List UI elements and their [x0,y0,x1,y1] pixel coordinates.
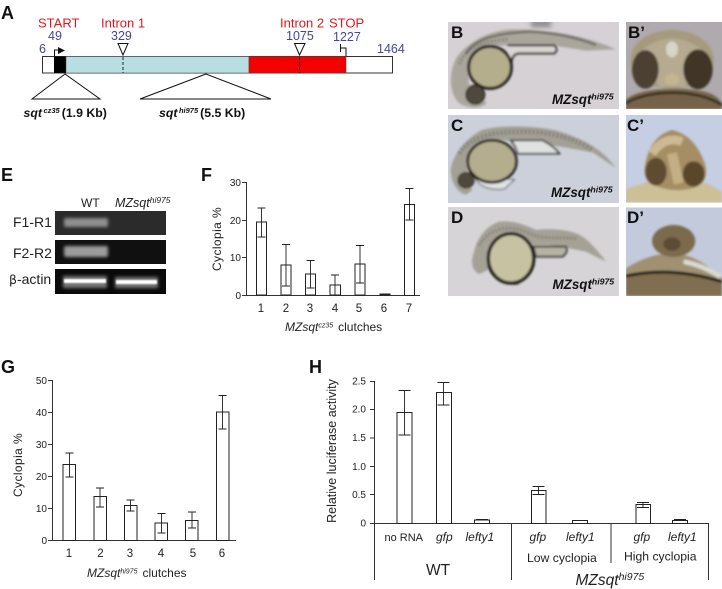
stop marker [340,44,346,56]
x tick labels [258,303,412,315]
start arrow [54,47,65,56]
MZsqt label: MZsqt [576,572,619,589]
panel label A: A [1,3,14,23]
row labels: F1-R1 [13,214,52,230]
photo C label: C [451,116,463,135]
y ticks: 0.5 [352,490,366,501]
axes [48,380,236,540]
allele label cz35: (1.9 Kb) [62,106,107,120]
position numbers: 1464 [377,42,405,56]
row labels [9,214,52,287]
x tick labels: 5 [190,548,196,560]
photo B prime label: B’ [628,23,645,42]
x tick labels: 7 [406,303,412,315]
position numbers: 329 [111,29,132,43]
bars [256,204,414,296]
y ticks: 1.5 [352,433,366,444]
genotype label B: hi975 [591,92,614,102]
x axis title: cz35 [318,322,333,330]
Intron 2 label: Intron 2 [280,16,324,30]
treatment labels: gfp [634,530,651,544]
treatment labels: gfp [436,530,453,544]
photo B label: B [451,23,463,42]
x axis title: hi975 [120,568,138,576]
treatment labels [384,530,697,544]
x tick labels: 1 [258,303,264,315]
photo D [448,207,619,296]
intron 2 marker [294,44,305,55]
position numbers: 49 [48,29,62,43]
lane label MZsqt: hi975 [150,195,171,205]
y ticks: 0 [41,536,47,547]
allele label cz35: sqt [24,106,43,120]
insertion triangle hi975 [140,74,271,99]
y ticks: 20 [230,216,241,227]
bars [397,392,688,524]
photo B prime [626,22,722,109]
x tick labels: 6 [219,548,225,560]
STOP label: STOP [329,16,364,30]
MZsqt label: hi975 [619,571,644,583]
y ticks [230,178,241,302]
y ticks: 2.0 [352,404,366,416]
x tick labels: 3 [307,303,313,315]
gene bar [42,56,392,73]
row labels: β-actin [9,271,51,287]
y ticks: 30 [36,440,47,451]
position numbers [39,29,405,56]
treatment labels: gfp [530,530,547,544]
START label: START [38,16,79,30]
treatment labels: lefty1 [566,530,595,544]
y ticks: 20 [36,472,47,483]
photo D prime label: D’ [627,208,644,227]
error bars [258,188,414,295]
x axis title: clutches [142,566,187,580]
y axis title: Relative luciferase activity [325,378,339,523]
gel F2-R2 [55,240,166,264]
lane label MZsqt: MZsqt [115,196,150,210]
allele label hi975: (5.5 Kb) [200,106,245,120]
genotype label C: hi975 [590,184,613,194]
high cyclopia label: High cyclopia [624,550,697,564]
y ticks [36,376,47,547]
x tick labels: 2 [97,548,104,560]
y ticks: 30 [230,178,241,189]
x tick labels: 5 [356,303,362,315]
insertion triangle cz35 [32,74,100,99]
y ticks: 0 [360,518,366,530]
panel label G: G [1,357,15,377]
intron 1 marker [118,44,128,55]
allele label hi975: hi975 [179,106,199,115]
genotype label C: MZsqt [551,185,590,200]
error bars [398,382,686,520]
panel label E: E [1,165,13,185]
axes [242,182,420,296]
y ticks: 40 [36,408,47,419]
x axis title: MZsqt [87,566,121,580]
panel H: bar chart [309,357,709,589]
treatment labels: no RNA [384,532,424,544]
photo C prime label: C’ [627,116,644,135]
panel G: bar chart [1,357,236,580]
x tick labels: 1 [66,548,72,560]
y axis title: Cyclopia % [210,207,224,271]
x tick labels [66,548,225,560]
x tick labels: 4 [158,548,165,560]
treatment labels: lefty1 [466,530,494,544]
error bars [66,396,226,533]
bars [63,412,229,540]
photo B [448,20,619,109]
gel F1-R1 [55,211,166,235]
y ticks: 2.5 [352,376,366,388]
panel F: bar chart [201,165,420,334]
allele label cz35: cz35 [43,106,61,115]
y ticks [352,376,366,530]
axes and group dividers [370,381,709,580]
photo C [448,115,619,203]
x tick labels: 2 [283,303,289,315]
lane label WT: WT [81,196,100,210]
y ticks: 10 [230,253,241,264]
x tick labels: 6 [381,303,387,315]
genotype label D: MZsqt [552,277,592,292]
WT label: WT [426,562,451,579]
y ticks: 10 [36,504,47,515]
row labels: F2-R2 [13,245,52,261]
x axis title: MZsqt [285,320,319,334]
low cyclopia label: Low cyclopia [527,551,597,565]
panel label H: H [309,357,322,377]
photo D prime [626,207,722,296]
y axis title: Cyclopia % [11,433,25,497]
x tick labels: 3 [127,548,133,560]
panel E: gel [1,165,171,294]
x axis title: clutches [338,320,382,334]
genotype label B: MZsqt [552,92,591,107]
position numbers: 6 [39,42,46,56]
y ticks: 1.0 [352,462,366,473]
allele label hi975: sqt [159,106,178,120]
photo C prime [626,115,722,203]
position numbers: 1227 [333,30,361,44]
position numbers: 1075 [286,29,314,43]
genotype label D: hi975 [592,276,614,286]
Intron 1 label: Intron 1 [101,16,145,30]
photo D label: D [451,208,463,227]
y ticks: 0 [235,291,241,302]
panel A: gene diagram [1,3,405,120]
y ticks: 50 [36,376,47,387]
gel beta-actin [55,269,166,294]
x tick labels: 4 [332,303,339,315]
treatment labels: lefty1 [668,530,697,544]
panel label F: F [201,165,212,185]
